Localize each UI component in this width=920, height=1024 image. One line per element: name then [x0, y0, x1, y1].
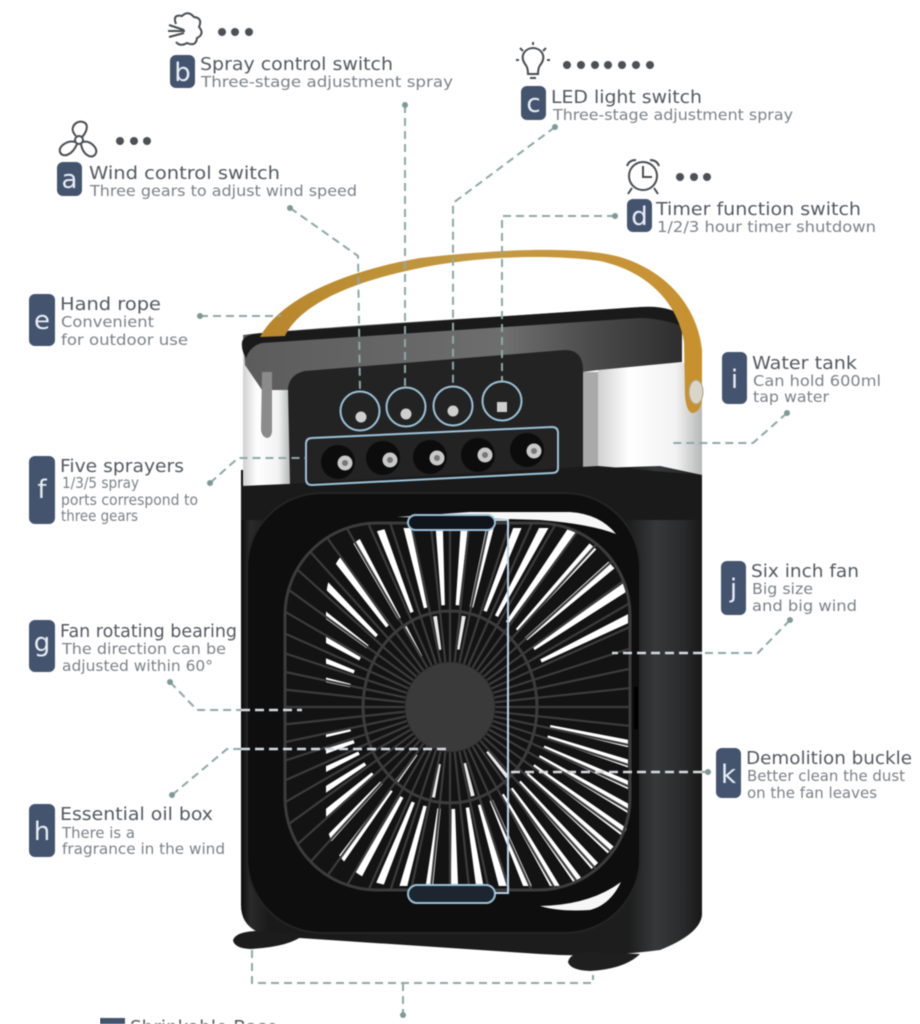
grille outer ring	[285, 523, 630, 890]
badge e: e	[34, 306, 50, 336]
description f	[61, 474, 198, 525]
icon: fan	[60, 122, 96, 156]
description f: three gears	[61, 507, 138, 525]
fan recess	[247, 493, 640, 933]
badge h	[29, 804, 55, 857]
badge h: h	[34, 817, 50, 847]
description j: Big size	[752, 580, 813, 598]
description a: Three gears to adjust wind speed	[89, 182, 357, 200]
blades seen through grille	[325, 527, 629, 887]
buckle highlight: top, bottom and link	[408, 515, 508, 903]
lid rim	[242, 307, 684, 358]
title k: Demolition buckle	[746, 748, 912, 769]
control buttons with highlight circles	[340, 382, 522, 430]
fan hub	[405, 662, 495, 752]
badge g	[29, 620, 55, 672]
badge j: j	[729, 574, 737, 604]
badge d: d	[631, 202, 648, 232]
title f: Five sprayers	[60, 456, 184, 477]
title b: Spray control switch	[200, 54, 393, 75]
icon: alarm clock	[627, 160, 659, 194]
title e: Hand rope	[60, 294, 161, 315]
callout a: wind control switch	[57, 122, 357, 200]
description j	[752, 580, 857, 615]
side latch	[634, 687, 638, 729]
callout b: spray control switch	[168, 13, 453, 91]
title j: Six inch fan	[751, 561, 859, 582]
badge b: b	[174, 58, 191, 88]
lid	[243, 308, 682, 390]
description j: and big wind	[752, 597, 857, 615]
description h: There is a	[61, 824, 135, 842]
description h	[61, 824, 225, 858]
callout e: hand rope	[29, 294, 188, 349]
description i: Can hold 600ml	[753, 372, 881, 390]
grille spokes	[286, 524, 629, 889]
description i	[753, 372, 881, 406]
fan grille	[283, 521, 632, 892]
badge c: c	[526, 89, 541, 119]
white sliver bottom	[540, 882, 621, 910]
badge i: i	[731, 365, 738, 395]
description e: for outdoor use	[61, 331, 188, 349]
badge g: g	[34, 628, 50, 658]
grille inner ring	[363, 611, 537, 803]
description e: Convenient	[61, 313, 154, 331]
description g: The direction can be	[61, 640, 226, 658]
sprayer highlight frame	[306, 427, 558, 485]
description d: 1/2/3 hour timer shutdown	[657, 218, 876, 236]
description k	[747, 767, 905, 802]
icon: light bulb	[516, 42, 550, 78]
badge k	[716, 748, 741, 798]
callout g: fan rotating bearing	[29, 620, 237, 675]
glass strip	[583, 372, 598, 470]
badge i	[722, 352, 747, 404]
hanging strap loop	[261, 372, 272, 438]
badge f: f	[37, 475, 47, 505]
foot right	[568, 952, 640, 971]
gear dots	[218, 28, 253, 36]
description e	[61, 313, 188, 349]
badge e	[29, 294, 55, 346]
right water tank	[598, 362, 702, 475]
description c: Three-stage adjustment spray	[552, 106, 793, 124]
title d: Timer function switch	[655, 199, 861, 220]
body	[241, 462, 702, 955]
description f: ports correspond to	[61, 491, 198, 509]
badge a: a	[62, 165, 77, 195]
callout j: six inch fan	[721, 561, 859, 615]
front black band	[241, 466, 702, 520]
badge a	[57, 162, 82, 196]
description h: fragrance in the wind	[62, 840, 225, 858]
title h: Essential oil box	[60, 804, 213, 825]
badge f	[29, 456, 55, 524]
badge k: k	[721, 760, 736, 790]
badge b	[170, 55, 195, 88]
title a: Wind control switch	[89, 163, 280, 184]
badge d	[627, 199, 652, 232]
sprayer nozzles	[321, 433, 544, 479]
carry handle	[260, 250, 702, 413]
description g: adjusted within 60°	[62, 657, 213, 675]
title g: Fan rotating bearing	[60, 621, 237, 642]
description b: Three-stage adjustment spray	[200, 73, 453, 91]
gear dots	[116, 137, 151, 145]
title c: LED light switch	[551, 87, 702, 108]
gear dots	[676, 173, 711, 181]
description g	[61, 640, 226, 675]
description i: tap water	[753, 388, 830, 406]
description k: on the fan leaves	[747, 784, 877, 802]
control panel	[288, 350, 583, 486]
leader lines	[167, 102, 793, 1018]
white sliver top	[397, 512, 616, 534]
badge c	[521, 86, 546, 120]
left water tank	[243, 350, 290, 487]
callout f: five sprayers	[29, 456, 198, 525]
title i: Water tank	[752, 353, 858, 374]
callout i: water tank	[722, 352, 881, 406]
callout k: demolition buckle	[716, 748, 912, 802]
callout d: timer function switch	[627, 160, 876, 236]
product: cooler fan	[203, 250, 703, 971]
description k: Better clean the dust	[747, 767, 905, 785]
foot left	[233, 931, 305, 949]
callout h: essential oil box	[29, 804, 225, 858]
callout c: LED light switch	[516, 42, 793, 124]
icon: spray cloud	[168, 13, 202, 45]
handle rivet	[689, 380, 703, 404]
gear dots	[563, 61, 654, 69]
description f: 1/3/5 spray	[62, 474, 139, 492]
